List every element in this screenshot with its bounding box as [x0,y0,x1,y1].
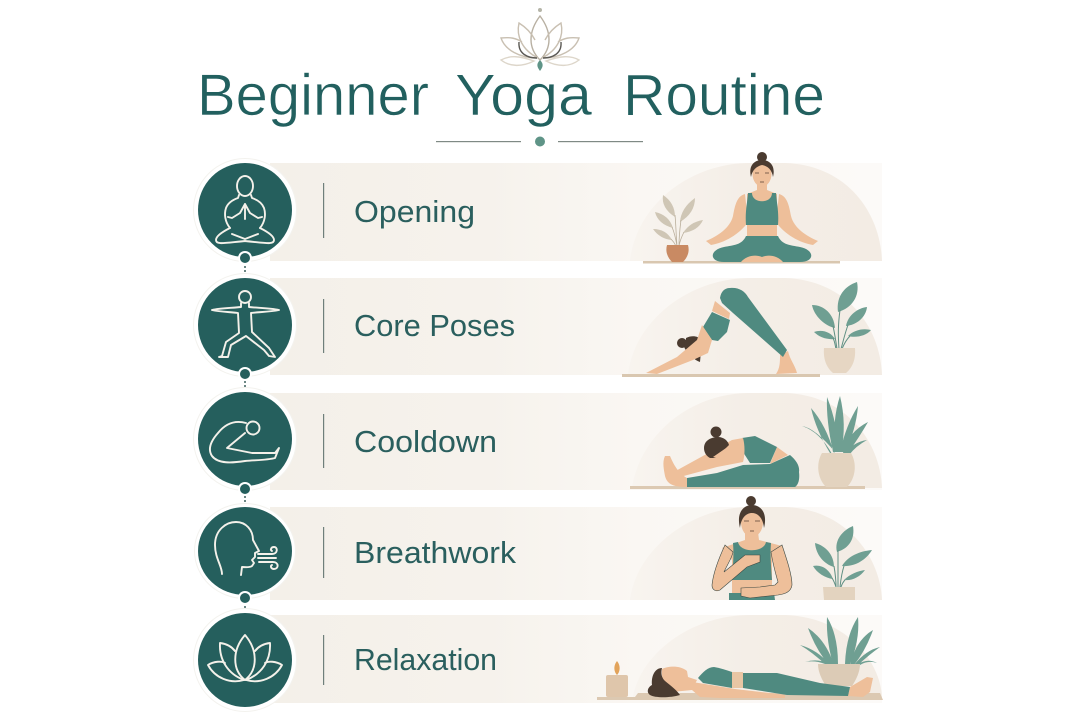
connector: step 3 to 4 [244,492,246,507]
band background [270,278,882,375]
step divider [323,635,324,685]
step 4 marker: breath profile icon [194,503,296,605]
label: Cooldown [354,424,497,459]
panel: core poses [270,278,882,377]
band background [270,507,882,600]
title: Routine [623,63,825,128]
step divider [323,414,324,468]
figure: lying relaxation [648,667,873,698]
label: Core Poses [354,308,515,343]
figure: seated meditation [706,152,818,262]
step 2 marker: warrior pose icon [193,273,297,381]
step divider [323,183,324,238]
plant [800,617,880,686]
arch backdrop [630,163,882,261]
mat [643,261,840,264]
mat [597,693,883,700]
title: Yoga [455,63,593,128]
panel: breathwork [270,496,882,600]
plant [802,396,868,487]
arch backdrop [630,507,882,600]
arch backdrop [633,615,882,697]
panel: relaxation [270,615,883,703]
icon: header lotus [501,8,579,71]
label: Opening [354,194,475,229]
title divider [436,136,643,146]
step 3 marker: forward fold icon [193,387,297,496]
mat [630,486,865,489]
step 5 marker: lotus icon [193,608,297,712]
step 1 marker: prayer pose icon [193,158,297,265]
plant [813,526,872,600]
step divider [323,527,324,578]
figure: downward dog [646,288,797,374]
step divider [323,299,324,353]
figure: breathing with hands on chest [712,496,792,600]
title: Beginner [197,63,429,128]
plant [812,282,871,373]
candle [606,661,628,697]
label: Breathwork [354,535,517,570]
band background [270,393,882,490]
label: Relaxation [354,642,497,677]
band background [270,163,882,261]
arch backdrop [628,278,882,375]
panel: cooldown [270,393,882,490]
title [197,63,825,128]
band background [270,615,882,703]
figure: seated forward fold [663,426,799,487]
connector: step 2 to 3 [244,377,246,393]
panel: opening [270,152,882,264]
connector: step 4 to 5 [244,602,246,616]
plant [653,195,703,262]
connector: step 1 to 2 [244,262,246,278]
arch backdrop [632,393,882,488]
mat [622,374,820,377]
